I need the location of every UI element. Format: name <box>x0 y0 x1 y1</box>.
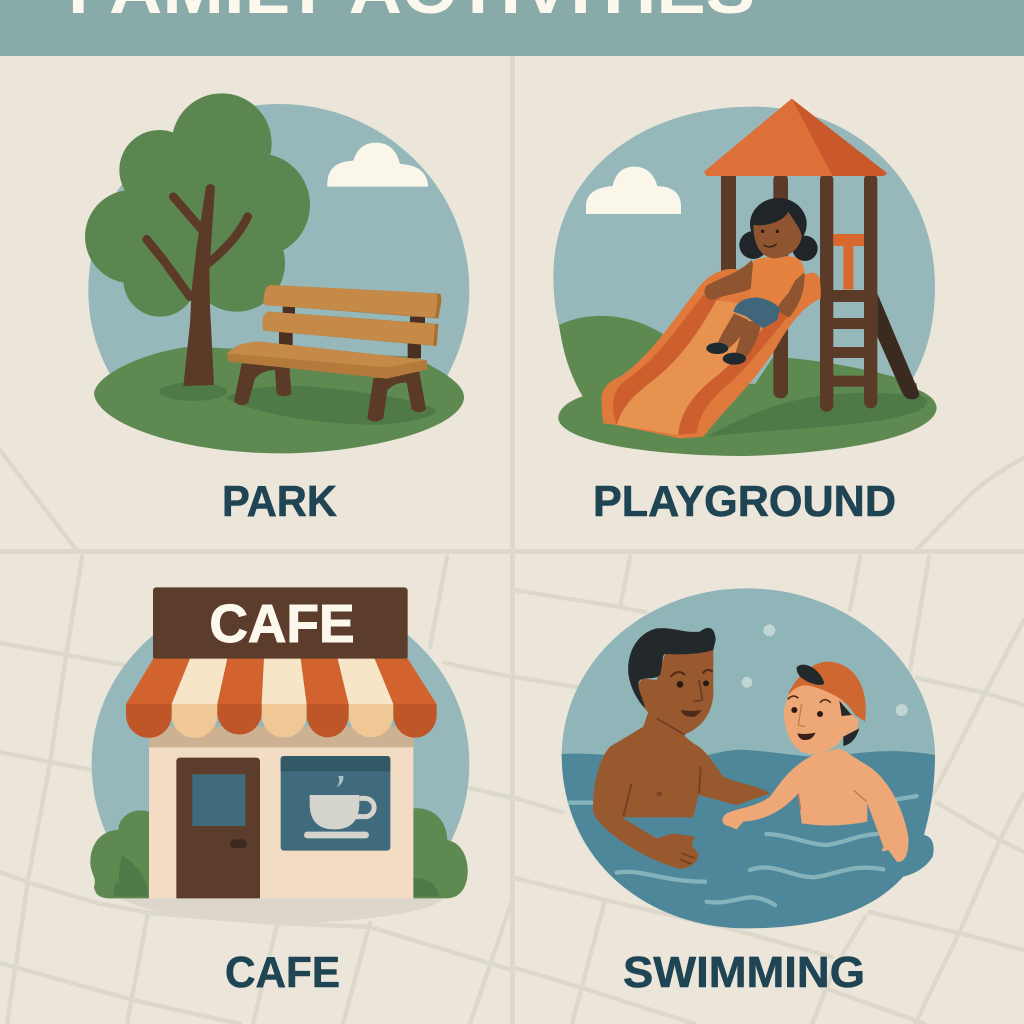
child on slide <box>704 198 818 365</box>
railing <box>833 234 864 289</box>
label: park: PARK <box>222 477 337 526</box>
panel: cafe <box>90 587 469 923</box>
panel: park <box>85 93 469 453</box>
sky circle <box>88 104 469 400</box>
man <box>593 628 770 869</box>
bushes <box>90 808 468 898</box>
bench <box>227 285 441 422</box>
shadow <box>120 898 443 923</box>
window with coffee cup <box>281 756 390 851</box>
brace <box>877 293 919 399</box>
cloud <box>586 167 681 214</box>
label: playground: PLAYGROUND <box>593 477 896 526</box>
sign text: CAFE <box>209 594 355 654</box>
panel: swimming <box>562 588 935 928</box>
ground <box>94 347 464 453</box>
building <box>149 740 413 898</box>
water <box>562 750 935 928</box>
door <box>176 758 260 898</box>
grass shadows <box>159 382 437 425</box>
cloud <box>327 143 428 187</box>
roof <box>704 99 887 176</box>
label: cafe: CAFE <box>225 948 340 997</box>
tower posts <box>721 173 877 412</box>
sign <box>153 587 408 660</box>
awning <box>126 659 437 738</box>
sky circle <box>92 590 469 897</box>
boy <box>722 662 908 862</box>
slide <box>602 269 821 438</box>
label: swimming: SWIMMING <box>623 948 865 997</box>
hill <box>559 316 673 410</box>
ground <box>558 384 937 456</box>
tree <box>85 93 310 386</box>
bubbles <box>742 624 908 716</box>
sky circle <box>562 588 935 757</box>
sky circle <box>553 107 935 395</box>
ripples <box>570 796 917 905</box>
panel: playground <box>553 99 937 456</box>
header band <box>0 0 1024 56</box>
